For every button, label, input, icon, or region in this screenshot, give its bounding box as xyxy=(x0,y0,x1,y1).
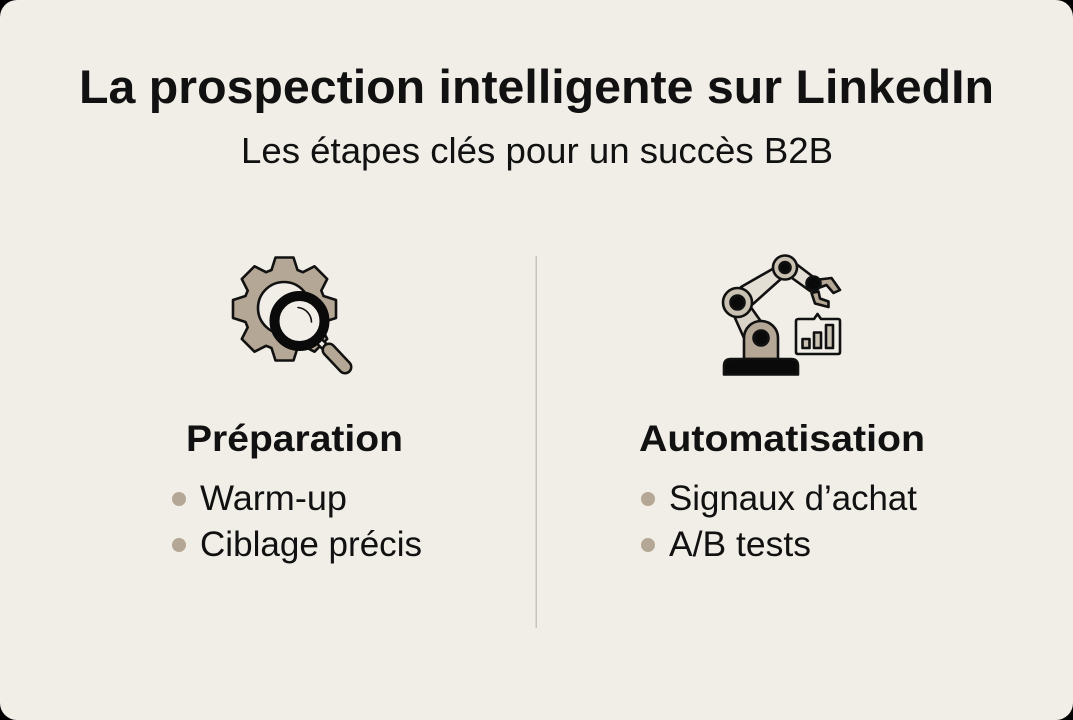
bullet: Warm-up: Warm-up xyxy=(200,479,347,518)
heading: Préparation: Préparation xyxy=(186,418,403,459)
heading: Automatisation: Automatisation xyxy=(639,418,925,459)
icon: gear with magnifying glass xyxy=(233,258,345,367)
bullet: A/B tests: A/B tests xyxy=(669,525,811,564)
title: La prospection intelligente sur LinkedIn xyxy=(79,60,994,113)
bullet: Ciblage précis: Ciblage précis xyxy=(200,525,422,564)
panel: Automatisation xyxy=(639,256,925,564)
center divider xyxy=(536,256,537,628)
bullet: Signaux d'achat: Signaux d’achat xyxy=(669,479,917,518)
subtitle: Les étapes clés pour un succès B2B xyxy=(241,130,833,171)
panel: Préparation xyxy=(172,258,422,564)
icon: robot arm with chart xyxy=(723,256,840,374)
